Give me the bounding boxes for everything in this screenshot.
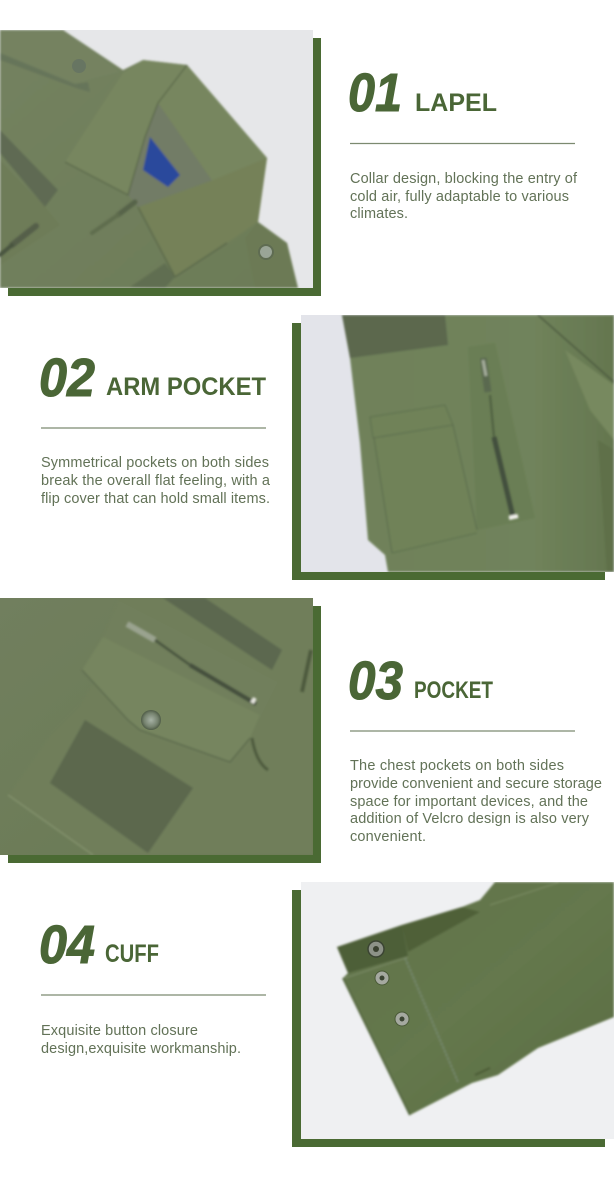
text block: 01 description: cold air, fully adaptable to various	[350, 189, 569, 205]
velcro strip	[163, 598, 282, 670]
heading: 03 pocket: POCKET	[414, 677, 493, 704]
panel: 03 pocket photo	[0, 598, 321, 863]
text block: 03 description: convenient.	[350, 829, 426, 845]
pocket flap	[103, 600, 278, 718]
icon: snap button	[141, 710, 161, 730]
text block: 01 description: Collar design, blocking the entry of	[350, 171, 578, 187]
inner cuff	[337, 925, 408, 973]
icon: snap buttons	[72, 59, 273, 259]
heading: 01 lapel: 01	[348, 63, 402, 123]
heading: 04 cuff	[39, 915, 159, 975]
heading: 04 cuff: CUFF	[105, 940, 159, 968]
text block: 03 description: space for important devices, and the	[350, 794, 588, 810]
text block: 04 description: design,exquisite workmanship.	[41, 1041, 241, 1057]
icon: rivets	[368, 941, 409, 1026]
text block: 03 description: addition of Velcro design is also very	[350, 811, 590, 827]
text block: 02 description: break the overall flat feeling, with a	[41, 473, 271, 489]
text block: 04 description: Exquisite button closure	[41, 1023, 198, 1039]
folds	[538, 315, 614, 382]
wrinkles	[252, 738, 268, 770]
zipper	[127, 624, 256, 704]
heading: 02 arm pocket	[39, 348, 266, 408]
zipper	[483, 358, 518, 518]
heading: 02 arm pocket: ARM POCKET	[106, 373, 266, 401]
panel: 01 lapel photo	[0, 30, 321, 296]
text block: 01 description: climates.	[350, 206, 408, 222]
heading: 03 pocket	[348, 651, 493, 711]
stitching	[405, 958, 458, 1082]
panel: 04 cuff photo	[292, 882, 614, 1147]
panel: 02 arm pocket photo	[292, 315, 614, 580]
text block: 03 description: The chest pockets on both sides	[350, 758, 564, 774]
velcro patch	[50, 720, 193, 853]
heading: 03 pocket: 03	[348, 651, 403, 711]
zippers	[0, 202, 135, 255]
text block: 02 description: Symmetrical pockets on both sides	[41, 455, 269, 471]
heading: 01 lapel: LAPEL	[415, 89, 497, 117]
text block: 02 description: flip cover that can hold small items.	[41, 491, 270, 507]
text block: 03 description: provide convenient and secure storage	[350, 776, 602, 792]
heading: 04 cuff: 04	[39, 915, 95, 975]
jacket body	[0, 30, 298, 288]
pocket	[370, 405, 477, 553]
zip placket	[468, 343, 535, 530]
velcro strip	[342, 315, 448, 358]
heading: 01 lapel	[348, 63, 497, 123]
heading: 02 arm pocket: 02	[39, 348, 95, 408]
